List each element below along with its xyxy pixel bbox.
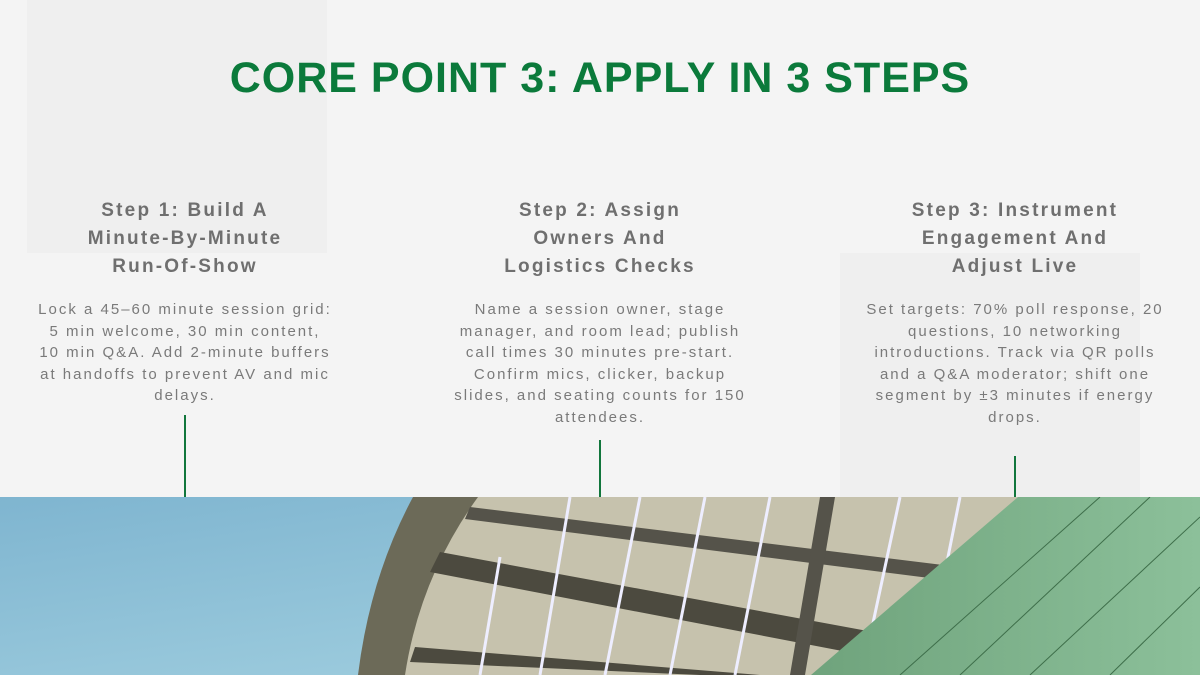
connector line 2 (599, 440, 601, 497)
step 3: and a Q&A moderator; shift one (880, 366, 1150, 382)
step 2: Step 2: Assign (519, 200, 681, 221)
step 3 (866, 200, 1164, 426)
step 2 (454, 200, 746, 426)
connector line 3 (1014, 456, 1016, 497)
photo: building (0, 497, 1200, 675)
step 3: questions, 10 networking (908, 322, 1122, 340)
step 3: Engagement And (922, 228, 1108, 249)
step 2: slides, and seating counts for 150 (454, 387, 746, 404)
step 1: Lock a 45–60 minute session grid: (38, 301, 332, 318)
step 2: manager, and room lead; publish (460, 322, 740, 340)
step 1: Minute-By-Minute (88, 228, 282, 249)
step 3: segment by ±3 minutes if energy (876, 387, 1154, 404)
step 3: Adjust Live (952, 256, 1078, 277)
step 2: Confirm mics, clicker, backup (474, 366, 726, 382)
step 2: Owners And (533, 228, 667, 249)
connector line 1 (184, 415, 186, 497)
step 1: Step 1: Build A (101, 200, 269, 221)
step 3: Set targets: 70% poll response, 20 (866, 301, 1164, 318)
step 1: at handoffs to prevent AV and mic (40, 366, 330, 382)
step 1 (38, 200, 332, 404)
step 3: Step 3: Instrument (912, 200, 1118, 221)
step 1: Run-Of-Show (112, 256, 258, 277)
step 3: drops. (988, 408, 1042, 426)
step 2: Logistics Checks (504, 256, 696, 277)
step 1: 10 min Q&A. Add 2-minute buffers (39, 344, 331, 361)
step 1: delays. (154, 387, 216, 404)
step 2: attendees. (555, 408, 645, 426)
step 1: 5 min welcome, 30 min content, (50, 322, 320, 340)
title: CORE POINT 3: APPLY IN 3 STEPS (230, 54, 970, 102)
step 2: call times 30 minutes pre-start. (466, 344, 734, 361)
step 2: Name a session owner, stage (475, 301, 725, 318)
step 3: introductions. Track via QR polls (874, 344, 1156, 361)
